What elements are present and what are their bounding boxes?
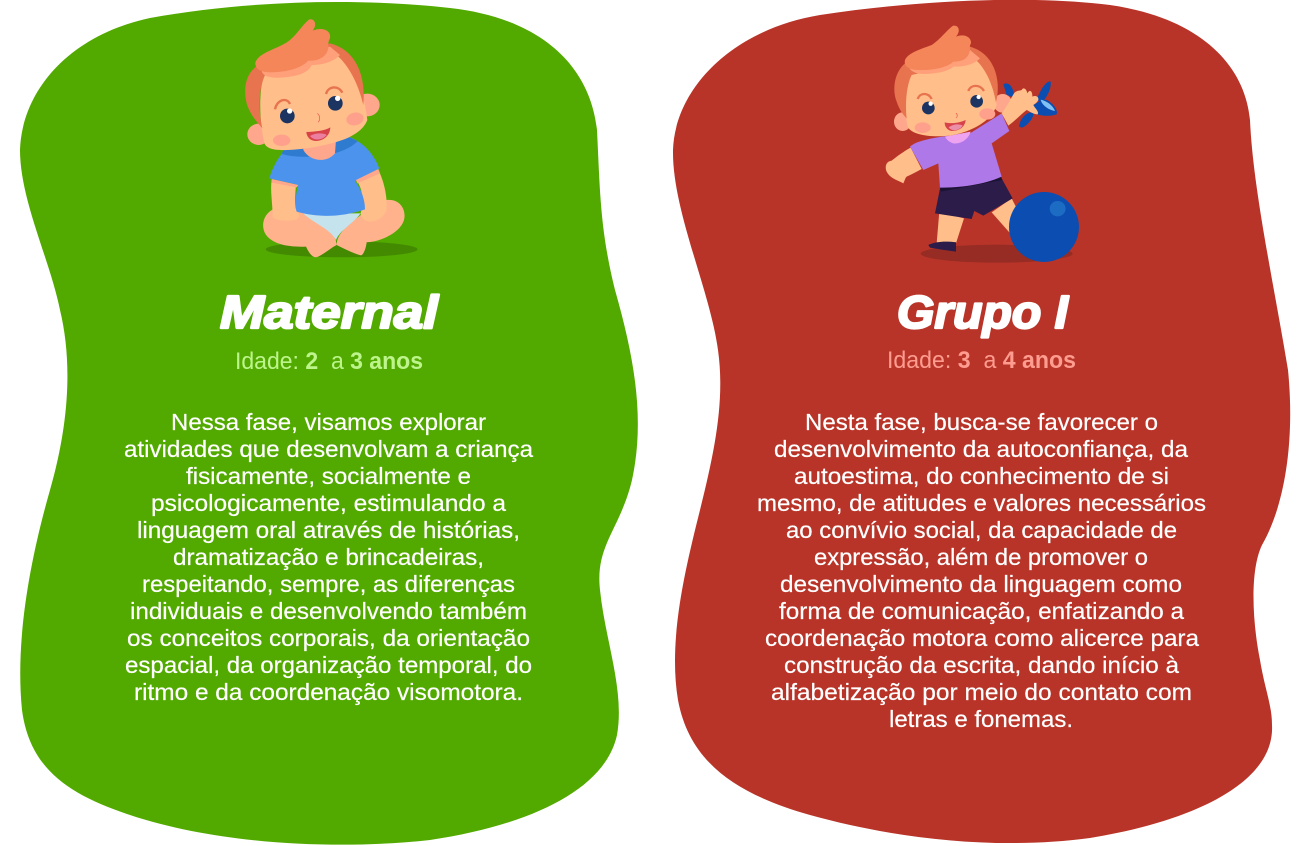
age range: 3 a 4 anos: Idade: 3 a 4 anos bbox=[887, 347, 1076, 374]
text block: Grupo I description bbox=[757, 409, 1206, 732]
text block: Maternal description: dramatização e brincadeiras, bbox=[173, 544, 484, 570]
title: Grupo I: Grupo I bbox=[897, 286, 1069, 338]
text block: Maternal description bbox=[124, 409, 533, 705]
text block: Grupo I description: desenvolvimento da linguagem como bbox=[780, 571, 1182, 597]
text block: Grupo I description: letras e fonemas. bbox=[889, 706, 1073, 732]
red blob background bbox=[673, 0, 1290, 843]
text block: Maternal description: psicologicamente, estimulando a bbox=[151, 490, 506, 516]
text block: Grupo I description: construção da escrita, dando início à bbox=[784, 652, 1179, 678]
text block: Maternal description: linguagem oral através de histórias, bbox=[137, 517, 520, 543]
green blob background bbox=[20, 2, 638, 845]
icon: standing baby with ball and toy plane bbox=[886, 26, 1079, 263]
age range: 2 a 3 anos: Idade: 2 a 3 anos bbox=[235, 348, 423, 375]
text block: Grupo I description: forma de comunicação, enfatizando a bbox=[779, 598, 1184, 624]
text block: Maternal description: atividades que desenvolvam a criança bbox=[124, 436, 533, 462]
text block: Grupo I description: ao convívio social, da capacidade de bbox=[786, 517, 1177, 543]
text block: Maternal description: individuais e desenvolvendo também bbox=[130, 598, 527, 624]
icon: sitting baby in blue shirt bbox=[245, 19, 418, 257]
text block: Maternal description: espacial, da organização temporal, do bbox=[125, 652, 532, 678]
text block: Maternal description: os conceitos corporais, da orientação bbox=[127, 625, 530, 651]
text block: Maternal description: Nessa fase, visamos explorar bbox=[171, 409, 486, 435]
panel: Maternal bbox=[20, 2, 638, 845]
text block: Grupo I description: expressão, além de promover o bbox=[814, 544, 1148, 570]
title: Maternal: Maternal bbox=[220, 286, 439, 338]
text block: Maternal description: ritmo e da coordenação visomotora. bbox=[134, 679, 523, 705]
text block: Grupo I description: alfabetização por meio do contato com bbox=[771, 679, 1192, 705]
text block: Grupo I description: autoestima, do conhecimento de si bbox=[794, 463, 1169, 489]
text block: Grupo I description: coordenação motora como alicerce para bbox=[765, 625, 1199, 651]
panel: Grupo I bbox=[673, 0, 1290, 843]
text block: Grupo I description: Nesta fase, busca-se favorecer o bbox=[805, 409, 1158, 435]
text block: Maternal description: fisicamente, socialmente e bbox=[186, 463, 471, 489]
text block: Maternal description: respeitando, sempre, as diferenças bbox=[142, 571, 515, 597]
text block: Grupo I description: mesmo, de atitudes e valores necessários bbox=[757, 490, 1206, 516]
text block: Grupo I description: desenvolvimento da autoconfiança, da bbox=[774, 436, 1188, 462]
